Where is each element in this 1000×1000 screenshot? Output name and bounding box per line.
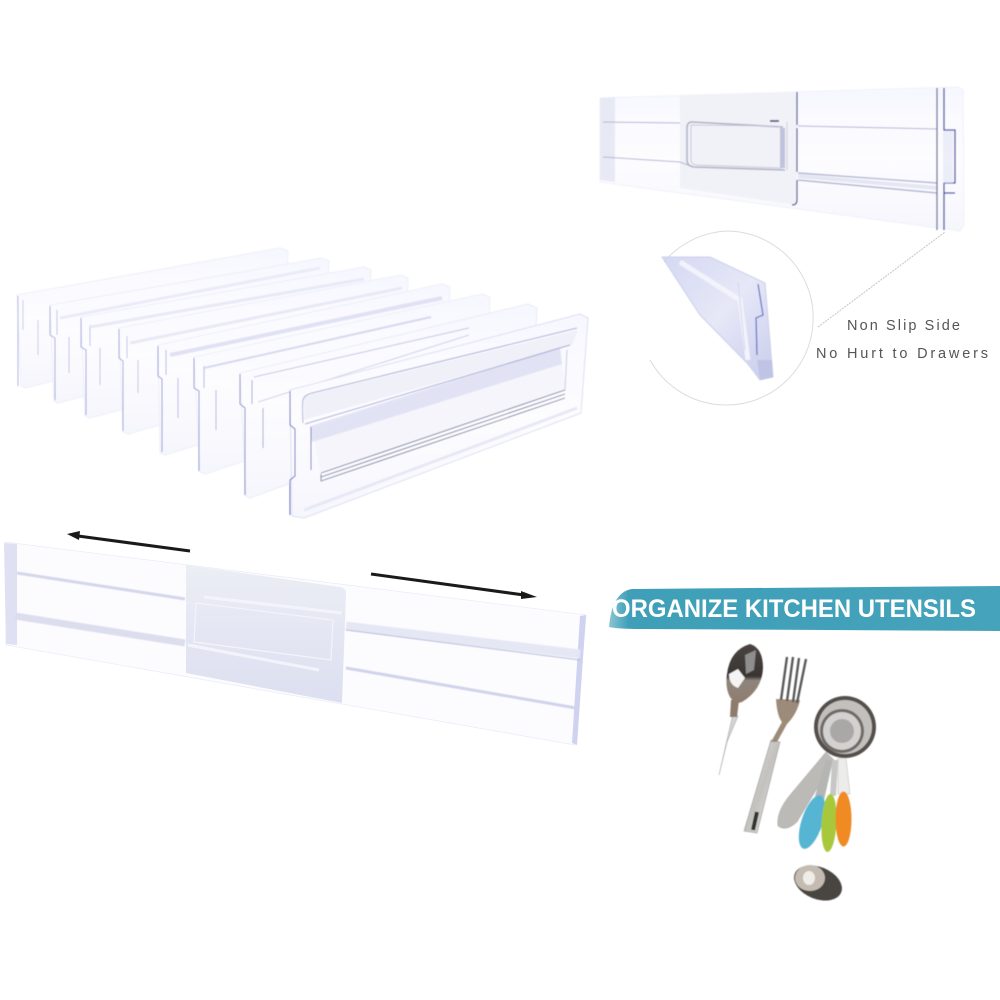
divider 1 [17,248,288,388]
divider body [5,542,586,745]
right end cap [572,615,586,745]
arrow right [371,574,537,599]
divider set: eight clear dividers [17,248,588,518]
divider 2 [50,258,329,403]
divider 4 [119,275,408,434]
kitchen utensils [719,644,876,907]
rails [15,573,580,708]
banner title: ORGANIZE KITCHEN UTENSILS [612,595,976,623]
expandable divider with arrows [4,531,586,745]
callout text line 2: No Hurt to Drawers [816,346,988,362]
callout: non slip side magnifier [650,231,988,405]
spoon [719,644,763,775]
banner [609,586,1000,631]
arrow left [67,531,190,551]
divider body [600,87,964,231]
divider 6 [194,294,490,474]
measuring cups [814,696,876,758]
slider window [687,122,785,170]
left end cap [4,543,17,645]
left end band [600,97,615,182]
green measuring spoon handle [820,760,838,852]
end profile of divider [662,257,773,380]
divider 5 [158,284,450,455]
blue measuring spoon handle [793,760,833,852]
slider panel [186,565,346,703]
callout text: Non Slip Side [847,318,960,334]
rails [603,122,937,193]
slider inner window [188,597,342,670]
grey measuring spoon handle [778,752,834,828]
small round lid [789,859,847,907]
divider 8 front [290,314,588,518]
magnifier circle [650,231,813,405]
pointer line [818,232,945,327]
slider window inner [691,125,781,168]
divider 7 [240,304,537,498]
fork [744,657,806,833]
top divider detail view [600,87,964,231]
divider 3 [81,267,371,418]
orange measuring spoon handle [836,758,852,846]
vertical seam [792,92,797,205]
slider panel [680,92,797,205]
right end lines [937,88,955,230]
